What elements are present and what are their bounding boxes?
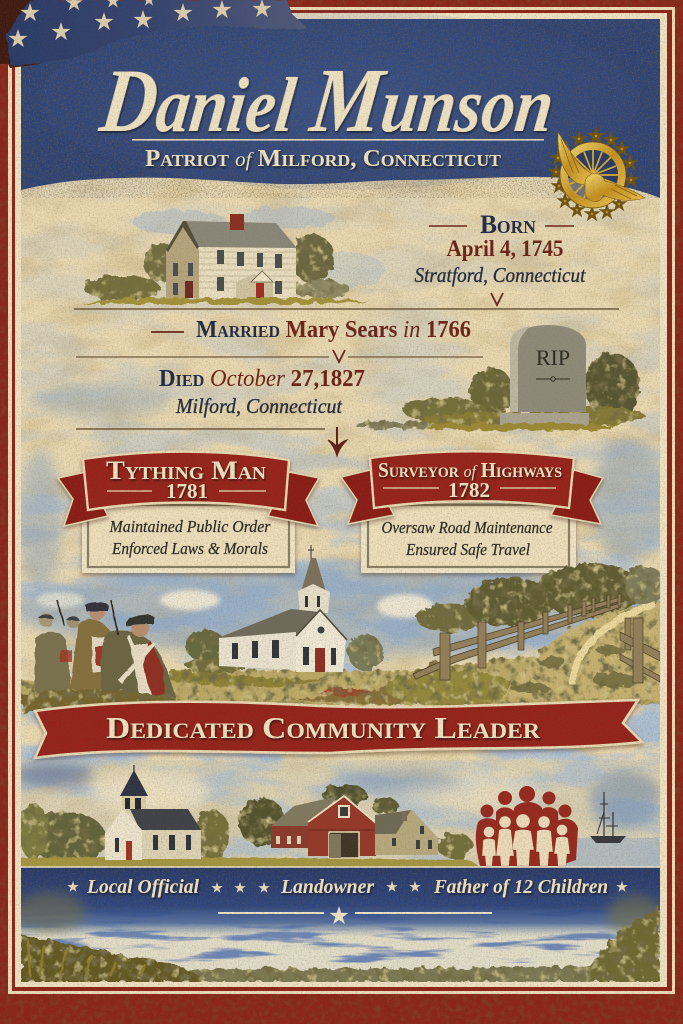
watercolor clouds behind house [132,207,385,288]
panel: blue title header [21,10,660,198]
soldiers [21,600,176,712]
farmhouse [375,810,438,855]
description box: Tything Man: Enforced Laws & Morals [111,539,268,558]
barn [271,796,376,858]
text block: died: Died October 27,1827 [159,366,365,392]
ground strip [21,857,480,867]
timeline divider 2 [76,356,483,358]
ground [21,655,660,706]
illustration: gravestone with shrubs [355,325,645,431]
ribbon: Surveyor of Highways 1782 [341,451,603,524]
star ribbon: Local Official, Landowner, Father of 12 Children: Local Official [86,876,199,898]
arrow: down to offices [328,427,347,456]
scene: town and family [15,760,661,867]
trees [19,784,473,864]
water horizon [560,838,660,867]
road [500,601,660,700]
arrow: born to married [491,293,503,305]
title: Daniel Munson: Daniel Munson [95,49,560,151]
description box: Surveyor of Highways [361,505,576,573]
banner: Dedicated Community Leader [35,700,642,758]
fence [413,594,660,683]
ribbon: Tything Man 1781: Tything Man [106,456,266,485]
arrow: married to died [333,350,345,362]
icon: family silhouettes [476,786,578,866]
text block: born: April 4, 1745 [446,236,564,261]
timeline divider 3 [76,428,325,430]
text block: died [159,366,365,418]
description box: Tything Man [82,505,295,573]
title underline [132,139,544,141]
star divider [218,906,492,924]
star ribbon: Local Official, Landowner, Father of 12 Children: Father of 12 Children [433,876,608,898]
lower sky [15,760,661,867]
scene: colonial landscape [21,545,665,712]
icon: sailing ship [590,792,626,843]
ribbon: Tything Man 1781 [58,452,319,526]
subtitle: Patriot of Milford, Connecticut [145,146,502,172]
text block: born: Stratford, Connecticut [414,263,587,287]
star ribbon: Local Official, Landowner, Father of 12 Children: Landowner [280,876,374,898]
timeline divider 1 [74,308,619,310]
hill trees [185,563,665,673]
ribbon: Surveyor of Highways 1782: 1782 [448,478,490,502]
description box: Surveyor of Highways: Ensured Safe Travel [405,540,530,559]
ribbon: Tything Man 1781: 1781 [166,479,208,503]
star ribbon: Local Official, Landowner, Father of 12 Children [67,876,628,898]
icon: gold eagle seal [551,130,645,218]
description box: Surveyor of Highways: Oversaw Road Maintenance [382,518,553,537]
paper background with watercolor sky [21,177,660,866]
panel: Tything Man [58,452,319,573]
text block: died: Milford, Connecticut [175,394,343,418]
water and blue band [14,867,663,982]
church [218,545,347,672]
illustration: gravestone with shrubs: RIP [536,345,570,370]
ribbon: Surveyor of Highways 1782: Surveyor of Highways [378,458,562,482]
description box: Tything Man: Maintained Public Order [109,517,271,536]
panel: Surveyor of Highways [341,451,603,573]
text block: married: Married Mary Sears in 1766 [196,317,471,343]
flag with stars [0,0,307,68]
banner: Dedicated Community Leader: Dedicated Community Leader [106,710,541,745]
church small [105,765,201,860]
text block: born: Born [480,210,536,239]
illustration: colonial house [82,214,372,304]
text block: born [414,210,587,287]
foreground grass [21,908,660,982]
